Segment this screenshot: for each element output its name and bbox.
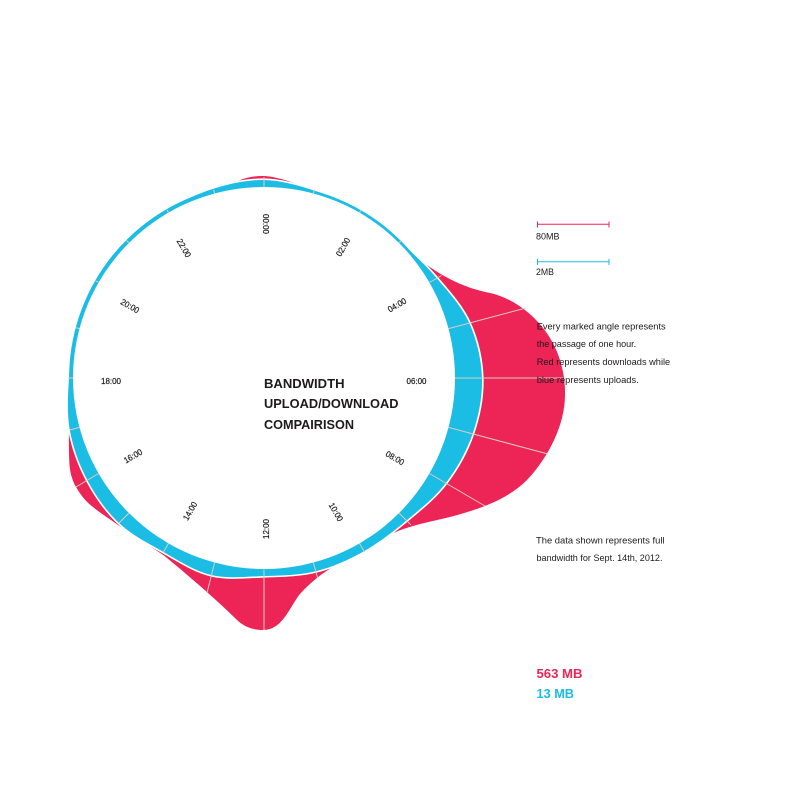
hour marks <box>68 177 563 630</box>
title <box>264 376 398 432</box>
upload area: blue <box>68 180 482 577</box>
radial chart <box>68 176 565 630</box>
hour labels: 02:00 <box>334 236 352 258</box>
title: UPLOAD/DOWNLOAD <box>264 396 398 411</box>
hour labels: 20:00 <box>119 297 141 315</box>
hour labels: 18:00 <box>101 376 121 386</box>
explanation text <box>537 320 670 385</box>
legend: download scale <box>536 222 609 242</box>
totals: 13 MB <box>536 686 574 701</box>
data note: The data shown represents full <box>536 534 664 545</box>
hour labels: 00:00 <box>261 214 271 234</box>
title: COMPAIRISON <box>264 417 354 432</box>
download area: red <box>69 176 565 630</box>
hour labels: 14:00 <box>181 500 199 522</box>
legend: upload scale <box>536 259 609 278</box>
hour labels <box>101 214 427 539</box>
data note: bandwidth for Sept. 14th, 2012. <box>536 552 662 563</box>
hour labels: 16:00 <box>122 447 144 465</box>
hour labels: 06:00 <box>406 376 427 386</box>
explanation text: blue represents uploads. <box>537 374 639 385</box>
legend: download scale: 80MB <box>536 231 560 242</box>
hour labels: 12:00 <box>261 519 271 539</box>
hour labels: 22:00 <box>175 237 193 259</box>
explanation text: the passage of one hour. <box>537 338 636 349</box>
legend: upload scale: 2MB <box>536 267 554 278</box>
totals: 563 MB <box>536 666 582 681</box>
hour labels: 10:00 <box>327 501 345 523</box>
totals <box>536 666 582 701</box>
explanation text: Red represents downloads while <box>537 356 670 367</box>
hour labels: 08:00 <box>384 449 406 467</box>
explanation text: Every marked angle represents <box>537 320 666 332</box>
title: BANDWIDTH <box>264 376 344 391</box>
data note <box>536 534 664 563</box>
inner white dial <box>73 187 455 569</box>
hour labels: 04:00 <box>386 296 408 314</box>
